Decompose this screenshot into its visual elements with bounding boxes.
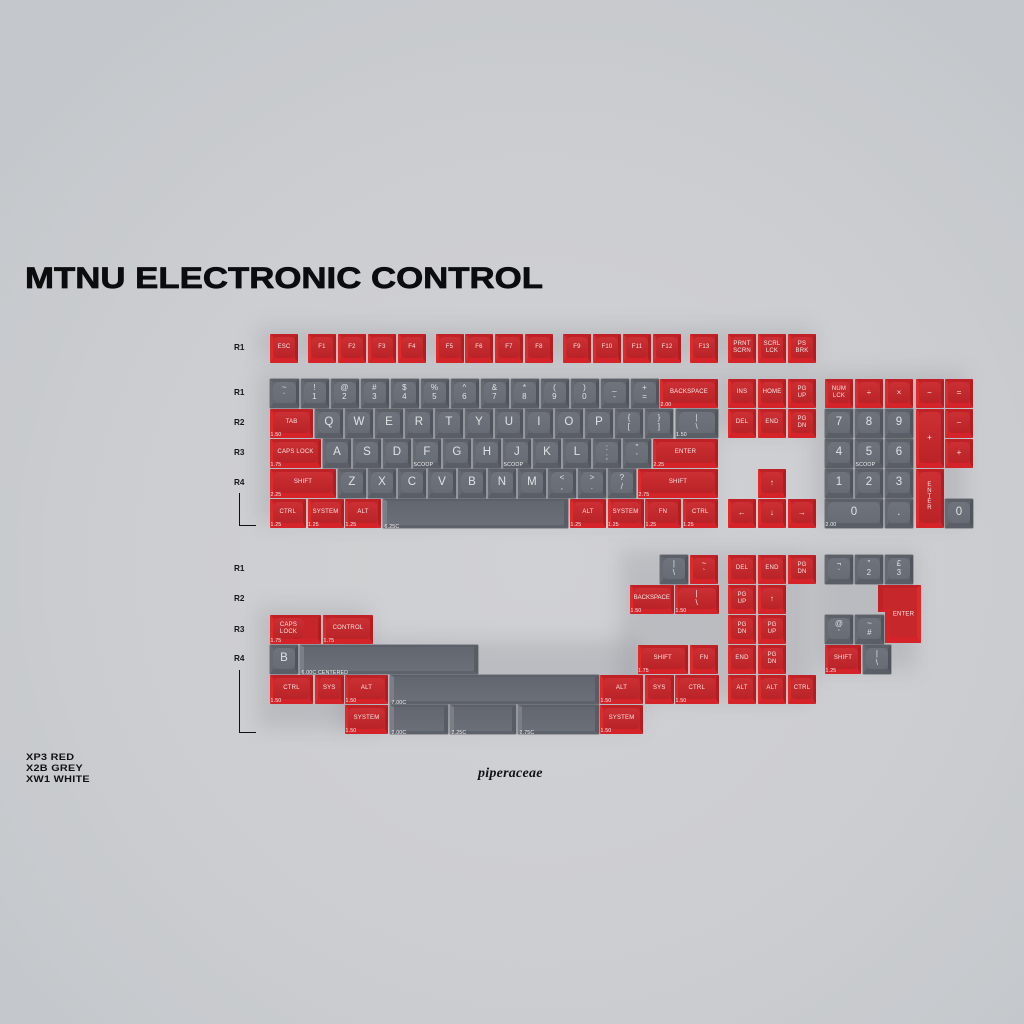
number row: ^ (463, 383, 466, 392)
function row: F5 (446, 344, 453, 350)
extras row 1 (659, 554, 718, 585)
panel: extra navigation keycaps: END (765, 565, 779, 571)
numpad: 9 (896, 416, 902, 428)
panel: ISO keycaps (824, 554, 921, 675)
home row: 1.75 (270, 462, 281, 468)
numpad: 1 (836, 476, 842, 488)
function row: SCRN (733, 348, 751, 354)
panel: ISO keycaps: ` (838, 568, 840, 576)
function row: F1 (318, 344, 326, 350)
qwerty row (270, 408, 719, 439)
navigation cluster: HOME (763, 389, 781, 395)
number row: 2 (342, 392, 347, 400)
numpad: + (957, 448, 961, 457)
extras row 5: modifiers and 7u spacebar: SYS (653, 685, 666, 691)
lower alpha row: V (438, 476, 446, 488)
function row: F10 (602, 344, 612, 350)
home row: H (483, 446, 491, 458)
row labels: extras (234, 564, 244, 663)
function row: F12 (662, 344, 672, 350)
row labels: extras: R1 (234, 564, 244, 573)
extras row 5: modifiers and 7u spacebar (270, 674, 719, 706)
extras row 6: split spacebars: 2.75C (520, 730, 534, 736)
lower alpha row (270, 468, 718, 499)
qwerty row: T (445, 416, 453, 428)
bottom modifier row with spacebar: 1.25 (346, 522, 356, 528)
function row: PRNT (733, 341, 751, 347)
function row: F2 (348, 344, 356, 350)
number row: 4 (402, 392, 407, 400)
qwerty row: [ (628, 422, 630, 430)
home row: ' (636, 452, 638, 460)
lower alpha row: SHIFT (294, 479, 312, 485)
numpad: 2 (866, 476, 872, 488)
extras row 4: right shift and FN: 1.75 (638, 668, 649, 674)
home row (270, 438, 718, 469)
number row: ) (583, 383, 586, 392)
extras row 2: BACKSPACE (634, 595, 670, 601)
extras row 5: modifiers and 7u spacebar: 1.50 (676, 698, 686, 704)
row labels: upper keyboard: R3 (234, 448, 244, 456)
extras row 3: stepped caps and control: 1.75 (324, 638, 334, 644)
navigation cluster: INS (737, 389, 747, 395)
bracket: extras bottom rows (239, 670, 256, 733)
panel: ISO keycaps: 3 (897, 568, 901, 576)
numpad: − (957, 418, 961, 427)
number row: * (523, 383, 526, 392)
qwerty row: ] (658, 422, 660, 430)
lower alpha row: 2.25 (270, 492, 281, 498)
panel: ISO keycaps: | (876, 649, 878, 658)
function row (270, 334, 816, 363)
qwerty row: O (564, 416, 574, 428)
extras row 2: | (696, 589, 698, 598)
number row: 9 (552, 392, 557, 400)
numpad: N (927, 488, 932, 494)
panel: ISO keycaps: 2 (867, 568, 871, 576)
function row: F8 (535, 344, 543, 350)
row labels: upper keyboard: R2 (234, 418, 244, 426)
extras row 1: | (673, 559, 675, 568)
brand wordmark: piperaceae (478, 766, 543, 781)
panel: ISO keycaps: ~ (867, 619, 872, 628)
row labels: extras: R2 (234, 594, 244, 603)
lower alpha row: X (378, 476, 386, 488)
lower alpha row: > (590, 473, 594, 482)
qwerty row: I (537, 416, 541, 428)
numpad: 6 (896, 446, 902, 458)
function row: PS (798, 341, 806, 347)
navigation cluster: DN (797, 422, 807, 428)
extras row 4: right shift and FN: SHIFT (654, 655, 672, 661)
home row: : (606, 443, 608, 452)
numpad: ÷ (867, 388, 871, 397)
extras row 5: modifiers and 7u spacebar: ALT (361, 685, 372, 691)
navigation cluster: ← (738, 508, 746, 517)
home row: D (393, 446, 401, 458)
function row: SCRL (764, 341, 780, 347)
navigation cluster: UP (798, 392, 806, 398)
extras row 5: modifiers and 7u spacebar: 1.50 (346, 698, 356, 704)
bracket: upper bottom row (239, 493, 256, 526)
bottom modifier row with spacebar: CTRL (692, 509, 708, 515)
lower alpha row: < (560, 473, 564, 482)
home row: F (423, 446, 431, 458)
extras row 3: stepped caps and control: LOCK (280, 628, 297, 634)
panel: ISO keycaps: # (867, 628, 872, 636)
row labels: extras: R4 (234, 654, 244, 663)
row labels: upper keyboard (234, 342, 244, 486)
numpad: SCOOP (856, 462, 875, 468)
row labels: upper keyboard: R1 (234, 388, 244, 396)
numpad: × (897, 388, 901, 397)
extras row 3: stepped caps and control (270, 615, 373, 644)
number row: = (642, 392, 647, 400)
numpad: T (928, 494, 931, 500)
numpad: . (897, 506, 901, 518)
panel: ISO keycaps: ' (838, 628, 840, 636)
numpad: NUM (832, 386, 846, 392)
extras row 5: modifiers and 7u spacebar: 7.00C (392, 700, 406, 706)
number row: $ (402, 383, 407, 392)
numpad: E (927, 499, 932, 505)
bottom modifier row with spacebar: SYSTEM (613, 509, 638, 515)
numpad: 4 (836, 446, 842, 458)
bottom modifier row with spacebar: CTRL (280, 509, 296, 515)
navigation cluster: DEL (736, 419, 748, 425)
extras row 6: split spacebars: SYSTEM (609, 715, 634, 721)
extras row 6: split spacebars: 2.25C (452, 730, 466, 736)
bottom modifier row with spacebar (270, 498, 718, 530)
numpad: R (927, 505, 932, 511)
extras row 6: split spacebars: 1.50 (600, 728, 611, 734)
qwerty row: Y (475, 416, 483, 428)
panel: extra keycaps left and centre (269, 554, 719, 736)
panel: extra navigation keycaps: END (735, 655, 749, 661)
qwerty row: U (505, 416, 513, 428)
home row: " (635, 443, 639, 452)
panel: ISO keycaps: SHIFT (834, 655, 852, 661)
function row: ESC (278, 344, 290, 350)
extras row 2: \ (696, 598, 698, 606)
number row: # (372, 383, 377, 392)
legend: materials: XW1 WHITE (26, 774, 90, 784)
title: MTNU ELECTRONIC CONTROL (25, 262, 543, 295)
bottom modifier row with spacebar: 1.25 (683, 522, 694, 528)
bottom modifier row with spacebar: 1.25 (570, 522, 581, 528)
legend: materials: X2B GREY (26, 762, 83, 772)
number row: 3 (372, 392, 377, 400)
lower alpha row: / (621, 482, 623, 490)
function row: F4 (408, 344, 416, 350)
number row: BACKSPACE (670, 389, 708, 395)
panel: extra navigation keycaps: UP (738, 598, 746, 604)
number row: 0 (582, 392, 587, 400)
extras row 2: 1.50 (676, 608, 686, 614)
extras row 2: 1.50 (630, 608, 641, 614)
qwerty row: | (696, 413, 698, 422)
qwerty row: TAB (286, 419, 297, 425)
panel: ISO keycaps: \ (876, 658, 878, 666)
main alpha block (269, 378, 719, 530)
qwerty row: R (415, 416, 423, 428)
extras row 3: stepped caps and control: CAPS (280, 622, 297, 628)
navigation cluster: → (798, 508, 806, 517)
number row: _ (612, 383, 617, 392)
number row: ~ (282, 383, 287, 392)
function row: F11 (632, 344, 642, 350)
bottom modifier row with spacebar: FN (659, 509, 667, 515)
panel: extra navigation keycaps: ALT (766, 685, 778, 691)
numpad: − (927, 388, 932, 397)
number row: + (642, 383, 647, 392)
function row: F7 (505, 344, 513, 350)
function row: F13 (699, 344, 709, 350)
panel: ISO keycaps: ¬ (837, 559, 841, 568)
numpad: 3 (896, 476, 902, 488)
numpad: LCK (833, 392, 845, 398)
number row: 7 (492, 392, 497, 400)
panel: ISO keycaps: £ (897, 559, 901, 568)
panel: extra navigation keycaps: DEL (736, 565, 748, 571)
lower alpha row: M (527, 476, 537, 488)
extras row 5: modifiers and 7u spacebar: CTRL (283, 685, 300, 691)
qwerty row: { (628, 413, 630, 422)
bottom modifier row with spacebar: 1.25 (308, 522, 319, 528)
panel: extra navigation keycaps: DN (737, 628, 747, 634)
extras row 4: B key and spacebar: B (280, 652, 288, 664)
extras row 5: modifiers and 7u spacebar: SYS (323, 685, 336, 691)
panel: extra navigation keycaps: DN (797, 568, 807, 574)
panel: extra navigation keycaps (728, 555, 816, 704)
qwerty row: } (658, 413, 660, 422)
bottom modifier row with spacebar: 1.25 (646, 522, 656, 528)
bottom modifier row with spacebar: 6.25C (384, 524, 399, 530)
bottom modifier row with spacebar: SYSTEM (313, 509, 338, 515)
panel: extra navigation keycaps: DN (767, 658, 777, 664)
panel: ISO keycaps: 1.25 (826, 668, 836, 674)
panel: extra navigation keycaps: ALT (736, 685, 748, 691)
qwerty row: P (595, 416, 603, 428)
lower alpha row: N (498, 476, 506, 488)
home row: ENTER (675, 449, 696, 455)
extras row 4: right shift and FN: FN (700, 655, 708, 661)
number row: 5 (432, 392, 437, 400)
iso enter key: ENTER (893, 612, 915, 618)
numpad: 0 (956, 506, 962, 518)
numpad: + (927, 433, 932, 442)
home row: G (452, 446, 462, 458)
row labels: extras: R3 (234, 625, 244, 634)
panel: extra navigation keycaps: PG (737, 622, 747, 628)
function row: BRK (796, 348, 808, 354)
panel: extra navigation keycaps: PG (767, 622, 777, 628)
function row: F9 (573, 344, 581, 350)
number row: 2.00 (660, 402, 671, 408)
extras row 3: stepped caps and control: CONTROL (333, 625, 363, 631)
extras row 6: split spacebars (345, 704, 643, 736)
extras row 4: B key and spacebar (269, 644, 479, 676)
row labels: upper keyboard: R4 (234, 478, 244, 486)
extras row 1: \ (673, 568, 675, 576)
panel: ISO keycaps: " (867, 559, 871, 568)
numpad: 2.00 (826, 522, 836, 528)
panel: extra navigation keycaps: UP (768, 628, 776, 634)
navigation cluster: ↑ (770, 478, 774, 487)
qwerty row: W (353, 416, 365, 428)
home row: S (363, 446, 371, 458)
number row: & (492, 383, 497, 392)
numpad: = (957, 388, 961, 397)
panel: extra navigation keycaps: ↑ (770, 594, 774, 603)
number row: 1 (312, 392, 317, 400)
legend: materials: XP3 RED (26, 752, 74, 762)
number row (269, 378, 718, 409)
lower alpha row: 2.75 (638, 492, 649, 498)
qwerty row: Q (324, 416, 334, 428)
extras row 5: modifiers and 7u spacebar: 1.50 (600, 698, 611, 704)
panel: extra navigation keycaps: CTRL (794, 685, 810, 691)
numpad: 0 (851, 506, 857, 518)
home row: L (574, 446, 580, 458)
number row: 6 (462, 392, 467, 400)
bottom modifier row with spacebar: ALT (582, 509, 594, 515)
numpad (824, 379, 974, 529)
number row: @ (340, 383, 349, 392)
home row: A (333, 446, 341, 458)
iso enter key (878, 585, 921, 643)
extras row 6: split spacebars: 2.00C (392, 730, 406, 736)
row labels: upper keyboard: R1 (234, 342, 244, 352)
number row: % (431, 383, 438, 392)
extras row 4: B key and spacebar: 6.00C CENTERED (302, 670, 348, 676)
panel: extra navigation keycaps: PG (767, 652, 777, 658)
numpad: 7 (836, 416, 842, 428)
lower alpha row: C (408, 476, 416, 488)
extras row 1: ~ (702, 559, 706, 568)
navigation cluster: PG (797, 386, 807, 392)
function row: F6 (475, 344, 483, 350)
navigation cluster: PG (797, 416, 807, 422)
home row: J (514, 446, 520, 458)
number row: ( (553, 383, 556, 392)
home row: SCOOP (414, 462, 433, 468)
extras row 5: modifiers and 7u spacebar: ALT (616, 685, 627, 691)
lower alpha row: SHIFT (669, 479, 687, 485)
bottom modifier row with spacebar: 1.25 (270, 522, 281, 528)
number row: - (613, 392, 616, 400)
lower alpha row: B (468, 476, 476, 488)
navigation cluster: END (765, 419, 779, 425)
panel: extra navigation keycaps: PG (797, 562, 807, 568)
navigation cluster: ↓ (770, 508, 774, 517)
lower alpha row: . (591, 482, 593, 490)
qwerty row: E (385, 416, 393, 428)
home row: 2.25 (654, 462, 664, 468)
qwerty row: \ (696, 422, 698, 430)
number row: 8 (522, 392, 527, 400)
extras row 5: modifiers and 7u spacebar: 1.50 (270, 698, 281, 704)
numpad: 8 (866, 416, 872, 428)
extras row 6: split spacebars: SYSTEM (354, 715, 379, 721)
extras row 5: modifiers and 7u spacebar: CTRL (689, 685, 705, 691)
extras row 2 (630, 585, 719, 614)
numpad: 5 (866, 446, 872, 458)
lower alpha row: Z (348, 476, 356, 488)
navigation cluster (728, 379, 816, 528)
function row: LCK (766, 348, 778, 354)
bottom modifier row with spacebar: 1.25 (608, 522, 619, 528)
panel: ISO keycaps: @ (835, 619, 843, 628)
panel: full keyboard layout (269, 334, 974, 530)
numpad: E (927, 482, 932, 488)
qwerty row: 1.50 (676, 432, 687, 438)
extras row 1: ` (703, 568, 705, 576)
home row: ; (606, 452, 608, 460)
legend: materials (26, 752, 90, 784)
number row: ` (283, 392, 286, 400)
lower alpha row: , (561, 482, 563, 490)
home row: SCOOP (504, 462, 523, 468)
extras row 6: split spacebars: 1.50 (346, 728, 356, 734)
extras row 4: right shift and FN (638, 645, 718, 674)
function row: F3 (378, 344, 386, 350)
panel: extra navigation keycaps: PG (737, 592, 747, 598)
home row: K (543, 446, 551, 458)
home row: CAPS LOCK (277, 449, 314, 455)
number row: ! (313, 383, 316, 392)
lower alpha row: ? (620, 473, 624, 482)
extras row 3: stepped caps and control: 1.75 (270, 638, 281, 644)
qwerty row: 1.50 (270, 432, 281, 438)
bottom modifier row with spacebar: ALT (357, 509, 369, 515)
